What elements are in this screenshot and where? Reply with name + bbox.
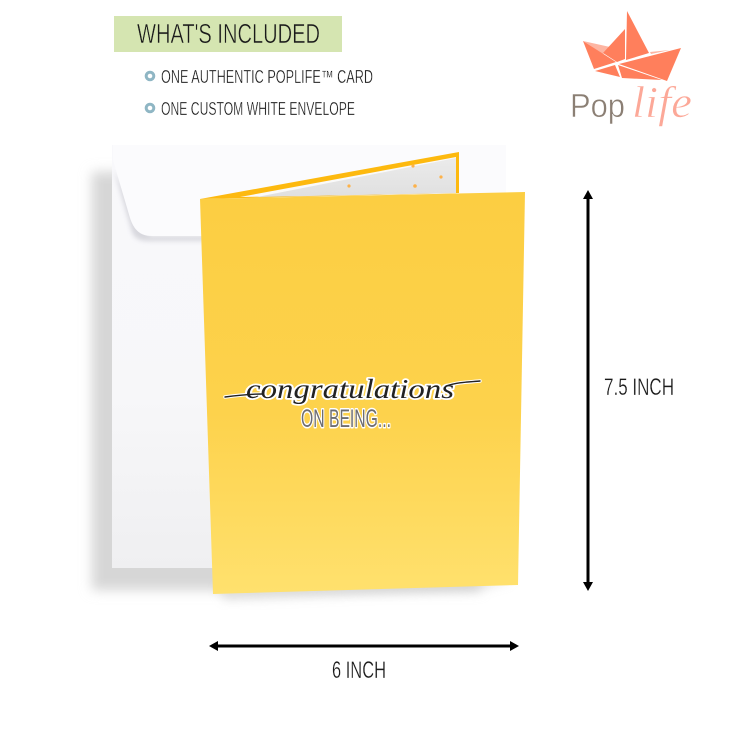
list: included items: ONE CUSTOM WHITE ENVELOPE	[161, 99, 355, 119]
envelope flap shadow	[114, 170, 300, 241]
heading: what's included: WHAT'S INCLUDED	[137, 18, 320, 49]
logo: poplife paper boat	[570, 11, 692, 127]
card inside panel	[200, 152, 459, 199]
list: included items: ONE AUTHENTIC POPLIFE™ CARD	[161, 67, 373, 87]
logo: poplife paper boat: life	[632, 78, 692, 127]
arrow: width	[209, 641, 519, 651]
card front shadow	[216, 580, 514, 600]
card greeting: ON BEING...	[301, 405, 391, 433]
envelope flap	[113, 145, 506, 236]
logo: poplife paper boat: Pop	[570, 87, 625, 124]
card greeting: congratulations	[246, 374, 454, 404]
card front	[200, 192, 525, 594]
list: included items	[146, 67, 373, 119]
label: width: 6 INCH	[332, 657, 386, 684]
heading: what's included	[114, 16, 342, 52]
envelope with shadow	[92, 145, 506, 590]
label: height: 7.5 INCH	[604, 374, 674, 401]
card greeting	[225, 374, 480, 433]
arrow: height	[583, 190, 593, 591]
